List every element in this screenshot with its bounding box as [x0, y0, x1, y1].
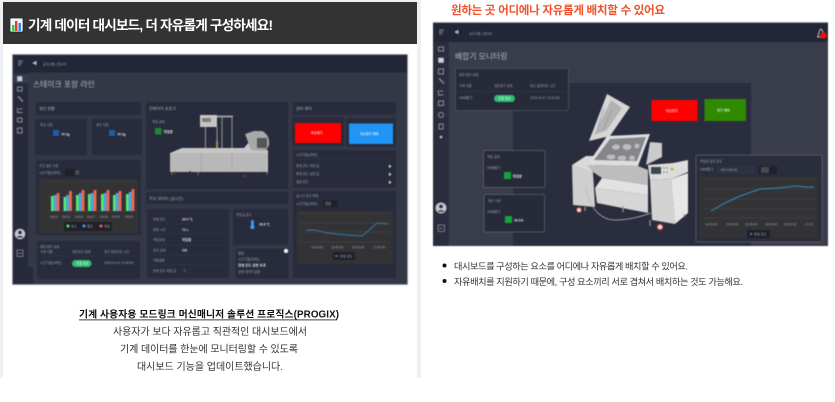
panel: key data table: 주요 데이터 (실시간): [149, 195, 184, 201]
icon: logout: [438, 225, 444, 232]
panel: key data table: 문의 상태: [153, 248, 166, 252]
panel: realtime temperature chart: 16:00:00: [352, 246, 365, 250]
panel: mixer temperature chart: 17:00: [805, 222, 813, 226]
button: release: 비상정지 해제: [360, 131, 379, 136]
panel: key data table: 현재 시간: [153, 227, 166, 232]
sidebar: [13, 72, 33, 284]
page gutters: [0, 0, 421, 378]
panel: mixer temperature chart: OB배합기: [700, 166, 713, 172]
panel: work status: [484, 150, 545, 188]
panel: right dashboard screenshot: [433, 22, 828, 246]
illustration: mixer machine: [572, 94, 688, 230]
button: emergency stop: [652, 100, 698, 121]
panel: key data table: 작업상태: [153, 237, 165, 242]
panel: mixer temperature chart: 15:00:00: [726, 222, 739, 226]
panel: work status: OB배합기: [487, 165, 500, 170]
panel: equipment control: 현재 온도 하한 값: [296, 163, 319, 168]
panel: mixer temperature chart: 14:00:00: [705, 222, 718, 226]
panel: mixer temperature chart: 현재 온도: [754, 232, 767, 236]
panel: retort status: 연결 정상: [498, 96, 511, 101]
top bar: [13, 55, 407, 72]
panel: quantity: OB배합기: [487, 209, 500, 214]
panel: key data table: [146, 192, 288, 278]
icon: user: [15, 229, 25, 239]
panel: key data table: 72 L: [182, 228, 189, 232]
top bar: 공지사항 | 한국어: [43, 62, 66, 66]
dashboard title: 스테이크 포장 라인: [33, 79, 95, 89]
panel: key data table: 현재 온도 하한 값: [153, 268, 176, 273]
panel: equipment control: 시간가열(3부턴): [296, 152, 318, 157]
panel: work status: 작업중: [512, 174, 522, 178]
panel: weekly production bar chart: 주간 생산 수량: [39, 163, 58, 168]
dashboard title: 배합기 모니터링: [455, 51, 507, 61]
panel: conveyor machine: 작업 상태: [152, 119, 165, 124]
header banner: [3, 2, 417, 44]
panel: key data table: 29.0 ℃: [182, 218, 194, 222]
panel: equipment control: [292, 102, 396, 188]
icon: logout: [17, 250, 23, 256]
panel: production status: 투입 수량: [40, 122, 53, 127]
text block: description: [113, 326, 307, 373]
panel: left dashboard screenshot: [12, 54, 408, 284]
panel: realtime temperature chart: 14:00:00: [311, 246, 324, 250]
panel: retort status: 기계 이름: [40, 249, 53, 254]
chart legend: [64, 222, 112, 231]
panel: key data table: ON: [182, 248, 188, 252]
panel: realtime temperature chart: 현재 온도: [340, 254, 353, 258]
panel: alarm: [235, 248, 289, 279]
panel: mixer temperature chart: 16:00:00: [765, 222, 778, 226]
panel: weekly production bar chart: [36, 160, 141, 235]
panel: weekly production bar chart: 04/16: [75, 215, 83, 219]
text block: description: 사용자가 보다 자유롭고 직관적인 대시보드에서: [113, 326, 307, 338]
panel: production status: 생산 수량: [96, 122, 109, 127]
panel: key data table: 현재 온도: [153, 216, 166, 222]
central panel: [513, 83, 751, 246]
text block: bullet list: 대시보드를 구성하는 요소를 어디에나 자유롭게 배치할 수 있어요.: [454, 260, 688, 272]
panel: retort status: 최근 업데이트 시간: [530, 83, 555, 88]
panel: mixer temperature chart: [696, 155, 822, 242]
panel: production status: 생산 현황: [39, 105, 55, 111]
panel: key data table: 작업중: [182, 237, 191, 242]
panel: weekly production bar chart: 04/19: [112, 215, 120, 219]
text block: bullet list: 자유배치를 지원하기 때문에, 구성 요소끼리 서로 겹쳐서 배치하는 것도 가능해요.: [454, 276, 743, 287]
top bar: 공지사항 | 한국어: [469, 31, 492, 36]
panel: realtime temperature chart: 17:00:00: [373, 246, 386, 250]
panel: weekly production bar chart: 04/15: [62, 215, 70, 219]
panel: realtime temperature chart: 15:00:00: [331, 246, 344, 250]
panel: retort status: [456, 68, 568, 110]
chart legend: 평균: [87, 224, 93, 228]
panel: quantity: [484, 194, 544, 232]
title: 기계 데이터 대시보드, 더 자유롭게 구성하세요!: [28, 18, 273, 33]
panel: retort status: 2025-04-20 14:59:50: [104, 261, 134, 265]
button: emergency stop: 비상정지: [666, 108, 678, 113]
panel: alarm: 알람: [238, 250, 244, 256]
panel: retort status: 시간가열(3부턴): [40, 260, 62, 265]
icon: user: [436, 202, 446, 214]
panel: mixer temperature chart: 15:30:00: [745, 222, 758, 226]
panel: weekly production bar chart: 04/14: [50, 215, 58, 219]
heading: product line: 기계 사용자용 모드링크 머신매니저 솔루션 프로직스(PROGIX): [79, 308, 339, 320]
panel: realtime temperature chart: 실시간 온도 변화: [296, 193, 318, 198]
panel: key data table: ℃: [183, 269, 187, 273]
panel: conveyor machine: 작업중: [164, 129, 173, 134]
panel: production status: 79 kg: [61, 132, 70, 136]
panel: equipment control: 현재 온도 상한 값: [296, 171, 319, 176]
icon: bell: [818, 29, 827, 39]
panel: production status: 79 kg: [117, 132, 126, 136]
chart legend: 최소: [71, 224, 77, 228]
panel: key data table: 자동알람: [153, 258, 165, 262]
text block: description: 대시보드 기능을 업데이트했습니다.: [137, 360, 283, 373]
panel: weekly production bar chart: 04/18: [100, 215, 108, 219]
panel: alarm: 시간가열(3부턴): [238, 256, 260, 262]
panel: weekly production bar chart: 04/17: [87, 215, 95, 219]
panel: room temperature: 작업실 온도: [236, 212, 252, 217]
panel: retort status: 네트워크 상태: [494, 83, 513, 88]
button: release: [704, 99, 746, 121]
panel: work status: 작업 상태: [487, 154, 500, 159]
panel: retort status: 레트/레크 상태: [459, 72, 478, 77]
panel: retort status: [37, 241, 140, 279]
panel: conveyor machine: 컨베이어 포장기: [149, 105, 176, 111]
heading: red title: 원하는 곳 어디에나 자유롭게 배치할 수 있어요: [451, 3, 665, 17]
panel: mixer temperature chart: 작업장 일간 온도: [700, 158, 722, 164]
panel: equipment control: 설정 온도: [296, 179, 309, 184]
panel: retort status: 기계 이름: [459, 83, 472, 88]
text block: bullet list: [442, 260, 743, 287]
panel: quantity: 26 EA: [514, 218, 524, 222]
text block: description: 기계 데이터를 한눈에 모니터링할 수 있도록: [120, 344, 298, 356]
icon: bar chart emoji: [10, 18, 23, 32]
panel: retort status: 최근 업데이트 시간: [104, 249, 129, 254]
panel: quantity: 생산 수량: [488, 198, 501, 203]
panel: alarm: 상태 데이터 없음: [238, 269, 260, 274]
panel: room temperature: [233, 209, 288, 245]
top bar: [433, 23, 828, 42]
illustration: conveyor: [170, 115, 269, 178]
panel: conveyor machine: [146, 102, 288, 189]
panel: mixer temperature chart: 16:30:00: [784, 222, 797, 226]
chart legend: 최대: [104, 224, 110, 228]
panel: retort status: 네트워크 상태: [72, 249, 91, 254]
button: release: 정지 해제: [717, 108, 730, 112]
panel: retort status: OB배합기: [459, 95, 472, 100]
panel: equipment control: 설비 제어: [296, 105, 312, 111]
panel: retort status: 연결 정상: [76, 261, 89, 266]
panel: weekly production bar chart: 04/20: [125, 215, 133, 219]
panel: alarm: 현재 온도 상한 초과: [238, 262, 267, 268]
panel: retort status: 2025-04-27 15:53:55: [530, 96, 560, 100]
panel: retort status: 레트/레크 상태: [40, 244, 59, 249]
sidebar: [433, 42, 449, 246]
panel: realtime temperature chart: [293, 191, 396, 278]
button: emergency stop: 비상정지: [311, 130, 323, 135]
panel: room temperature: 28.8 ℃: [259, 222, 271, 226]
panel: mixer temperature chart: 08-H-80-83: [721, 168, 737, 172]
panel: weekly production bar chart: 시간가열(3부턴): [39, 170, 60, 175]
panel: realtime temperature chart: 시간가열(3부턴): [296, 201, 318, 206]
panel: production status: [35, 102, 142, 155]
